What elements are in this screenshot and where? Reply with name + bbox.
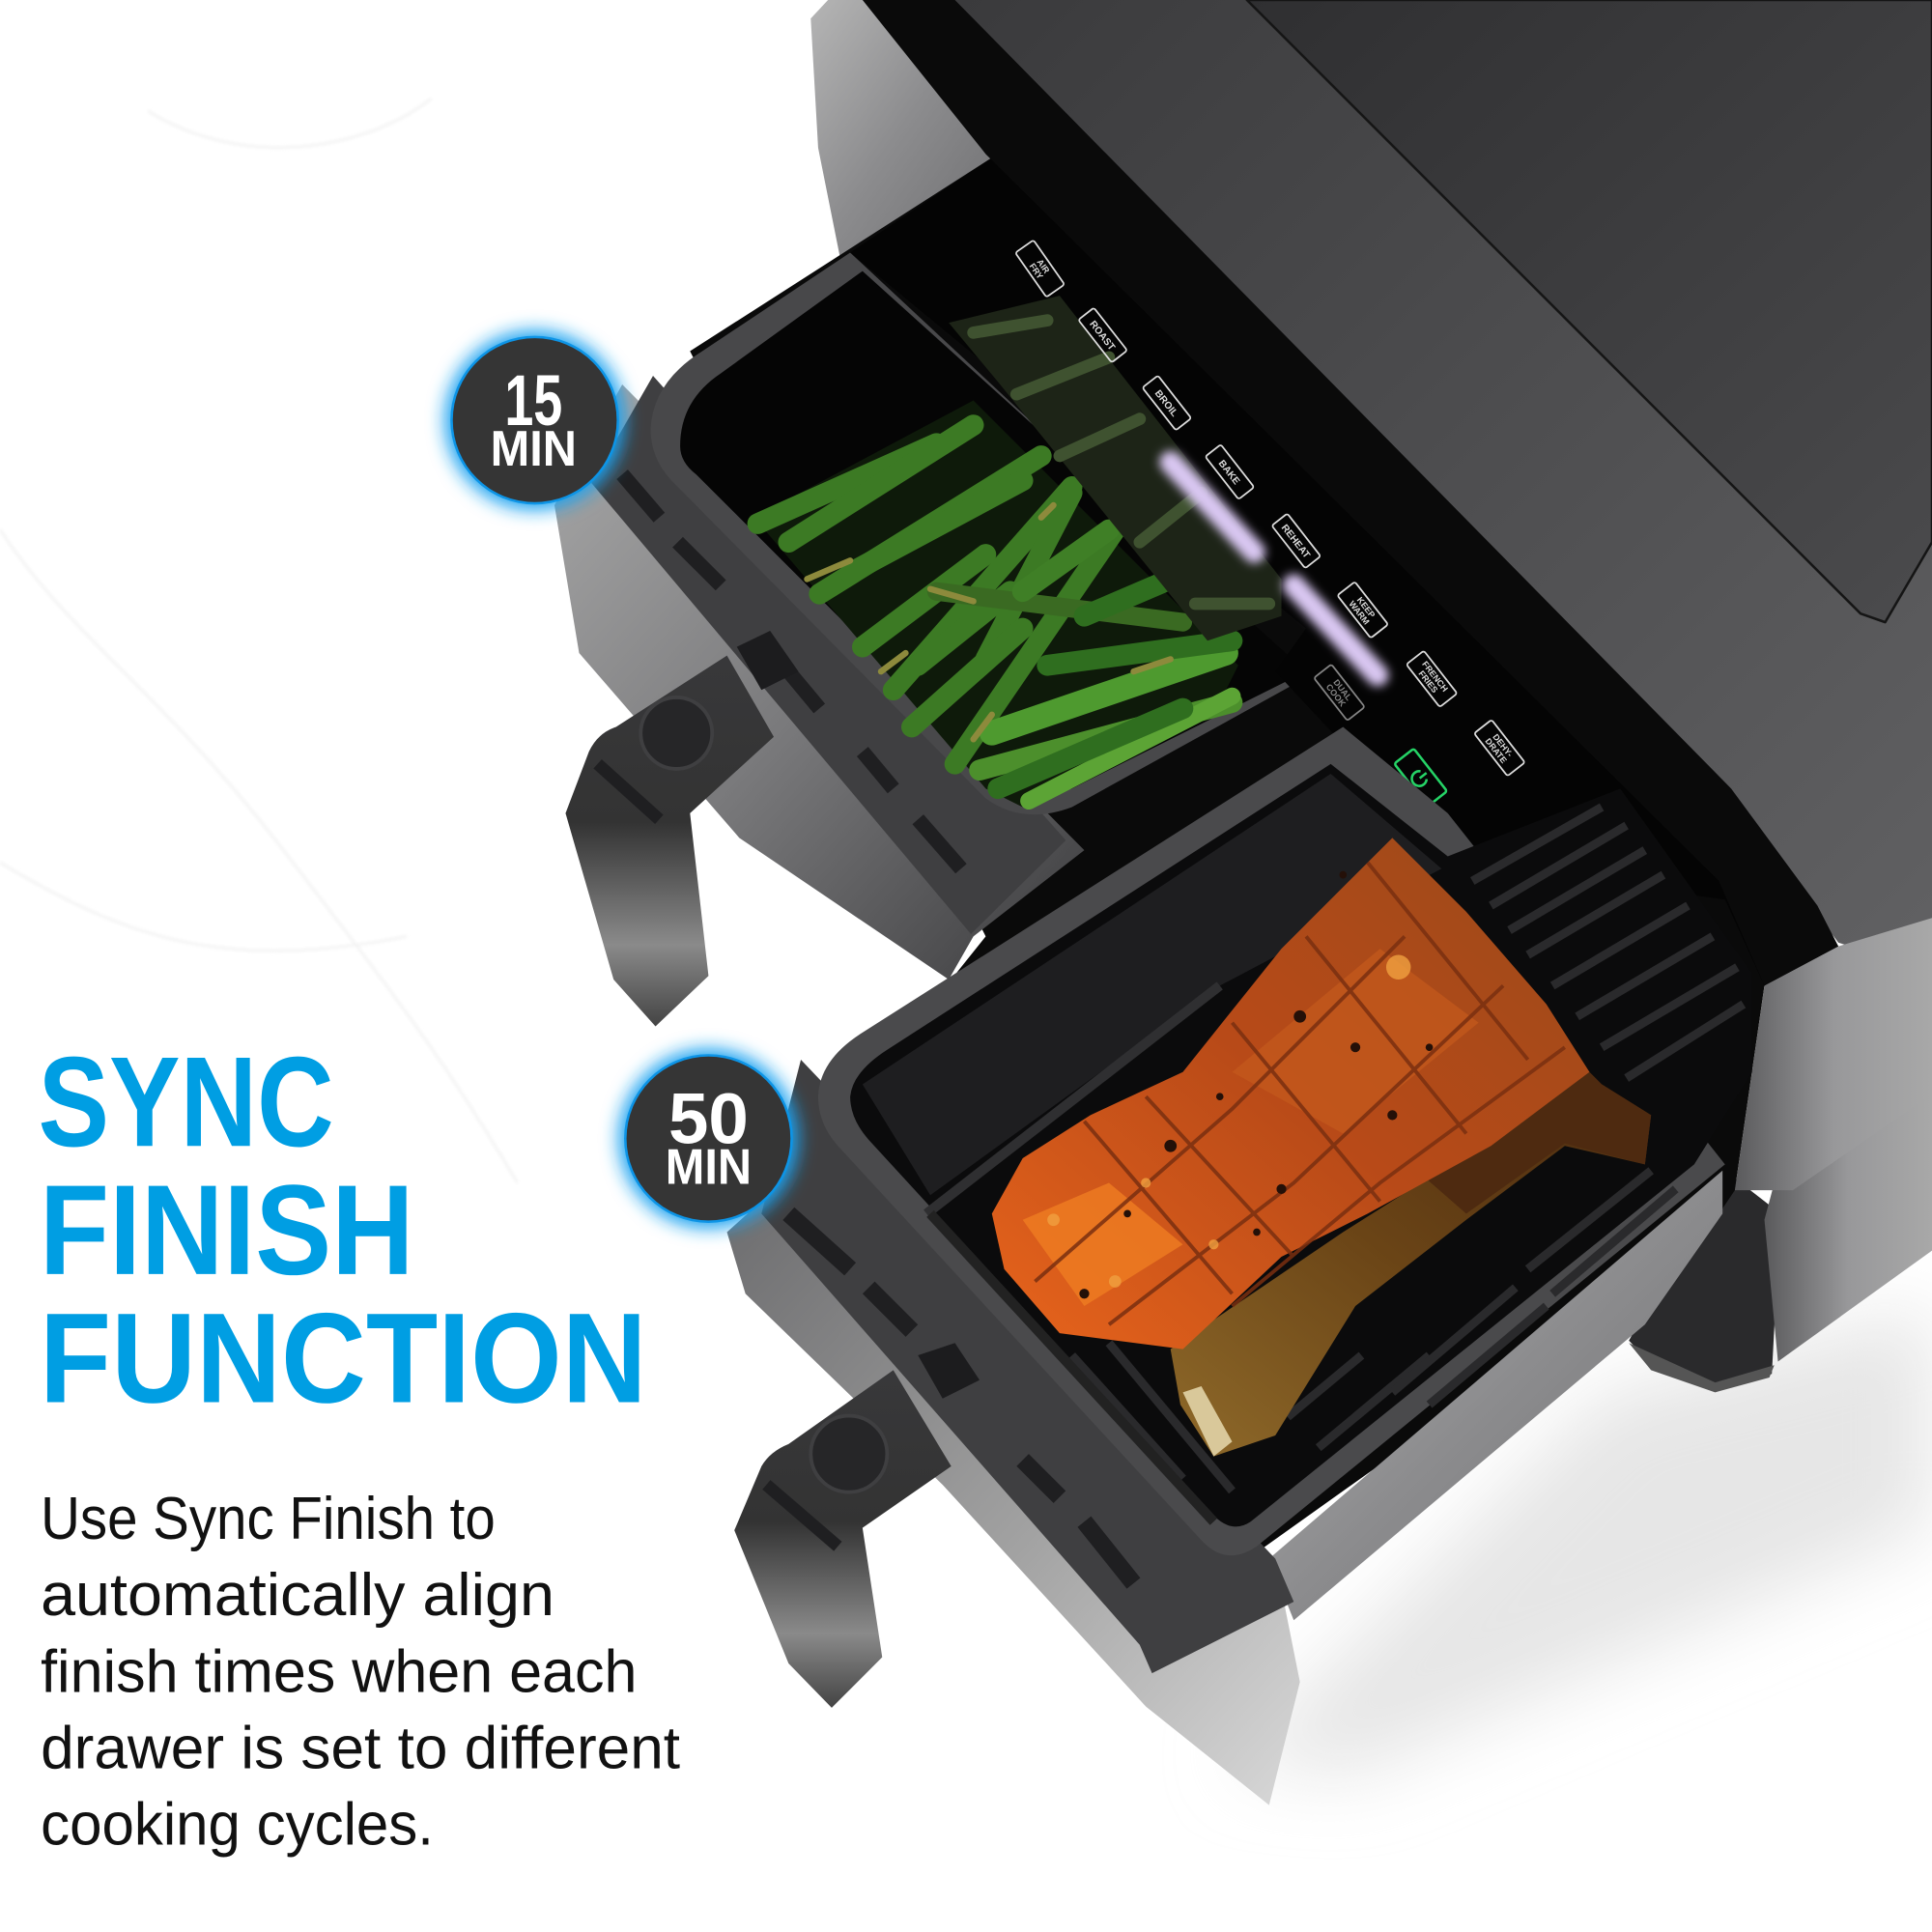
badge: 50 min: 50 [668, 1079, 749, 1159]
fryer shadow [1233, 1306, 1932, 1775]
button: keep warm: KEEP [1355, 595, 1378, 619]
button: dehydrate [1474, 720, 1525, 776]
description text: finish times when each [41, 1637, 637, 1705]
title: FUNCTION [40, 1288, 647, 1431]
button: reheat: REHEAT [1279, 523, 1312, 561]
button: reheat [1272, 514, 1321, 568]
badge: 15 min: MIN [491, 421, 577, 477]
button: air fry: FRY [1028, 262, 1045, 281]
description text: automatically align [41, 1561, 554, 1629]
upper handle button [640, 697, 712, 769]
lower basket rim [818, 727, 1725, 1555]
upper drawer latch [737, 631, 799, 690]
button: french fries: FRIES [1416, 668, 1440, 695]
button: broil: BROIL [1152, 388, 1179, 419]
description text: drawer is set to different [41, 1714, 680, 1781]
lower handle button [810, 1416, 887, 1492]
button: french fries [1406, 651, 1457, 707]
upper basket interior [680, 271, 1306, 793]
lower drawer side [1269, 1171, 1722, 1620]
upper handle [565, 656, 774, 1026]
badge: 50 min [618, 1048, 799, 1229]
button: air fry: AIR [1036, 257, 1052, 275]
button: keep warm [1337, 582, 1388, 639]
glass control panel [850, 157, 1836, 985]
asparagus reflection [949, 296, 1282, 640]
marble texture [0, 99, 518, 1182]
right silver corner [1735, 918, 1932, 1190]
button: french fries: FRENCH [1420, 659, 1450, 694]
air fryer product illustration [554, 0, 1932, 1805]
lower drawer front [727, 1060, 1300, 1805]
button: power [1394, 749, 1447, 807]
pork roast [992, 838, 1651, 1457]
asparagus [754, 401, 1238, 807]
lid panel [1247, 0, 1932, 622]
button: dual cook: COOK [1324, 682, 1348, 709]
silver side of housing [810, 0, 992, 259]
lower basket interior [850, 764, 1752, 1526]
title: FINISH [40, 1159, 414, 1302]
top surface [949, 0, 1932, 974]
button: dehydrate: DRATE [1483, 736, 1509, 765]
description text: cooking cycles. [41, 1790, 434, 1858]
badge: 15 min: 15 [504, 360, 562, 440]
badge: 15 min [444, 330, 625, 510]
button: keep warm: WARM [1347, 599, 1372, 626]
description text [41, 1485, 680, 1858]
button: dehydrate: DEHY- [1491, 732, 1515, 758]
button: air fry [1015, 240, 1065, 298]
lower basket wall [863, 774, 1441, 1195]
button: dual cook [1314, 665, 1365, 721]
basket grill slats [926, 807, 1744, 1521]
button: broil [1143, 376, 1191, 430]
fascia [863, 0, 1838, 985]
dark backing [690, 157, 1838, 1552]
description text: Use Sync Finish to [41, 1485, 496, 1552]
title: SYNC [39, 1031, 334, 1174]
button: roast [1078, 308, 1127, 362]
title [39, 1031, 647, 1431]
purple light reflections [1171, 462, 1378, 675]
button: bake: BAKE [1216, 459, 1241, 487]
control panel buttons [1015, 240, 1525, 807]
upper drawer front [554, 376, 1084, 980]
badge: 50 min: MIN [666, 1140, 752, 1196]
lower handle [734, 1370, 952, 1708]
upper basket rim [650, 252, 1306, 814]
button: bake [1206, 444, 1254, 499]
button: roast: ROAST [1087, 319, 1117, 354]
rear lower housing [1629, 1047, 1932, 1392]
button: dual cook: DUAL [1331, 677, 1354, 702]
